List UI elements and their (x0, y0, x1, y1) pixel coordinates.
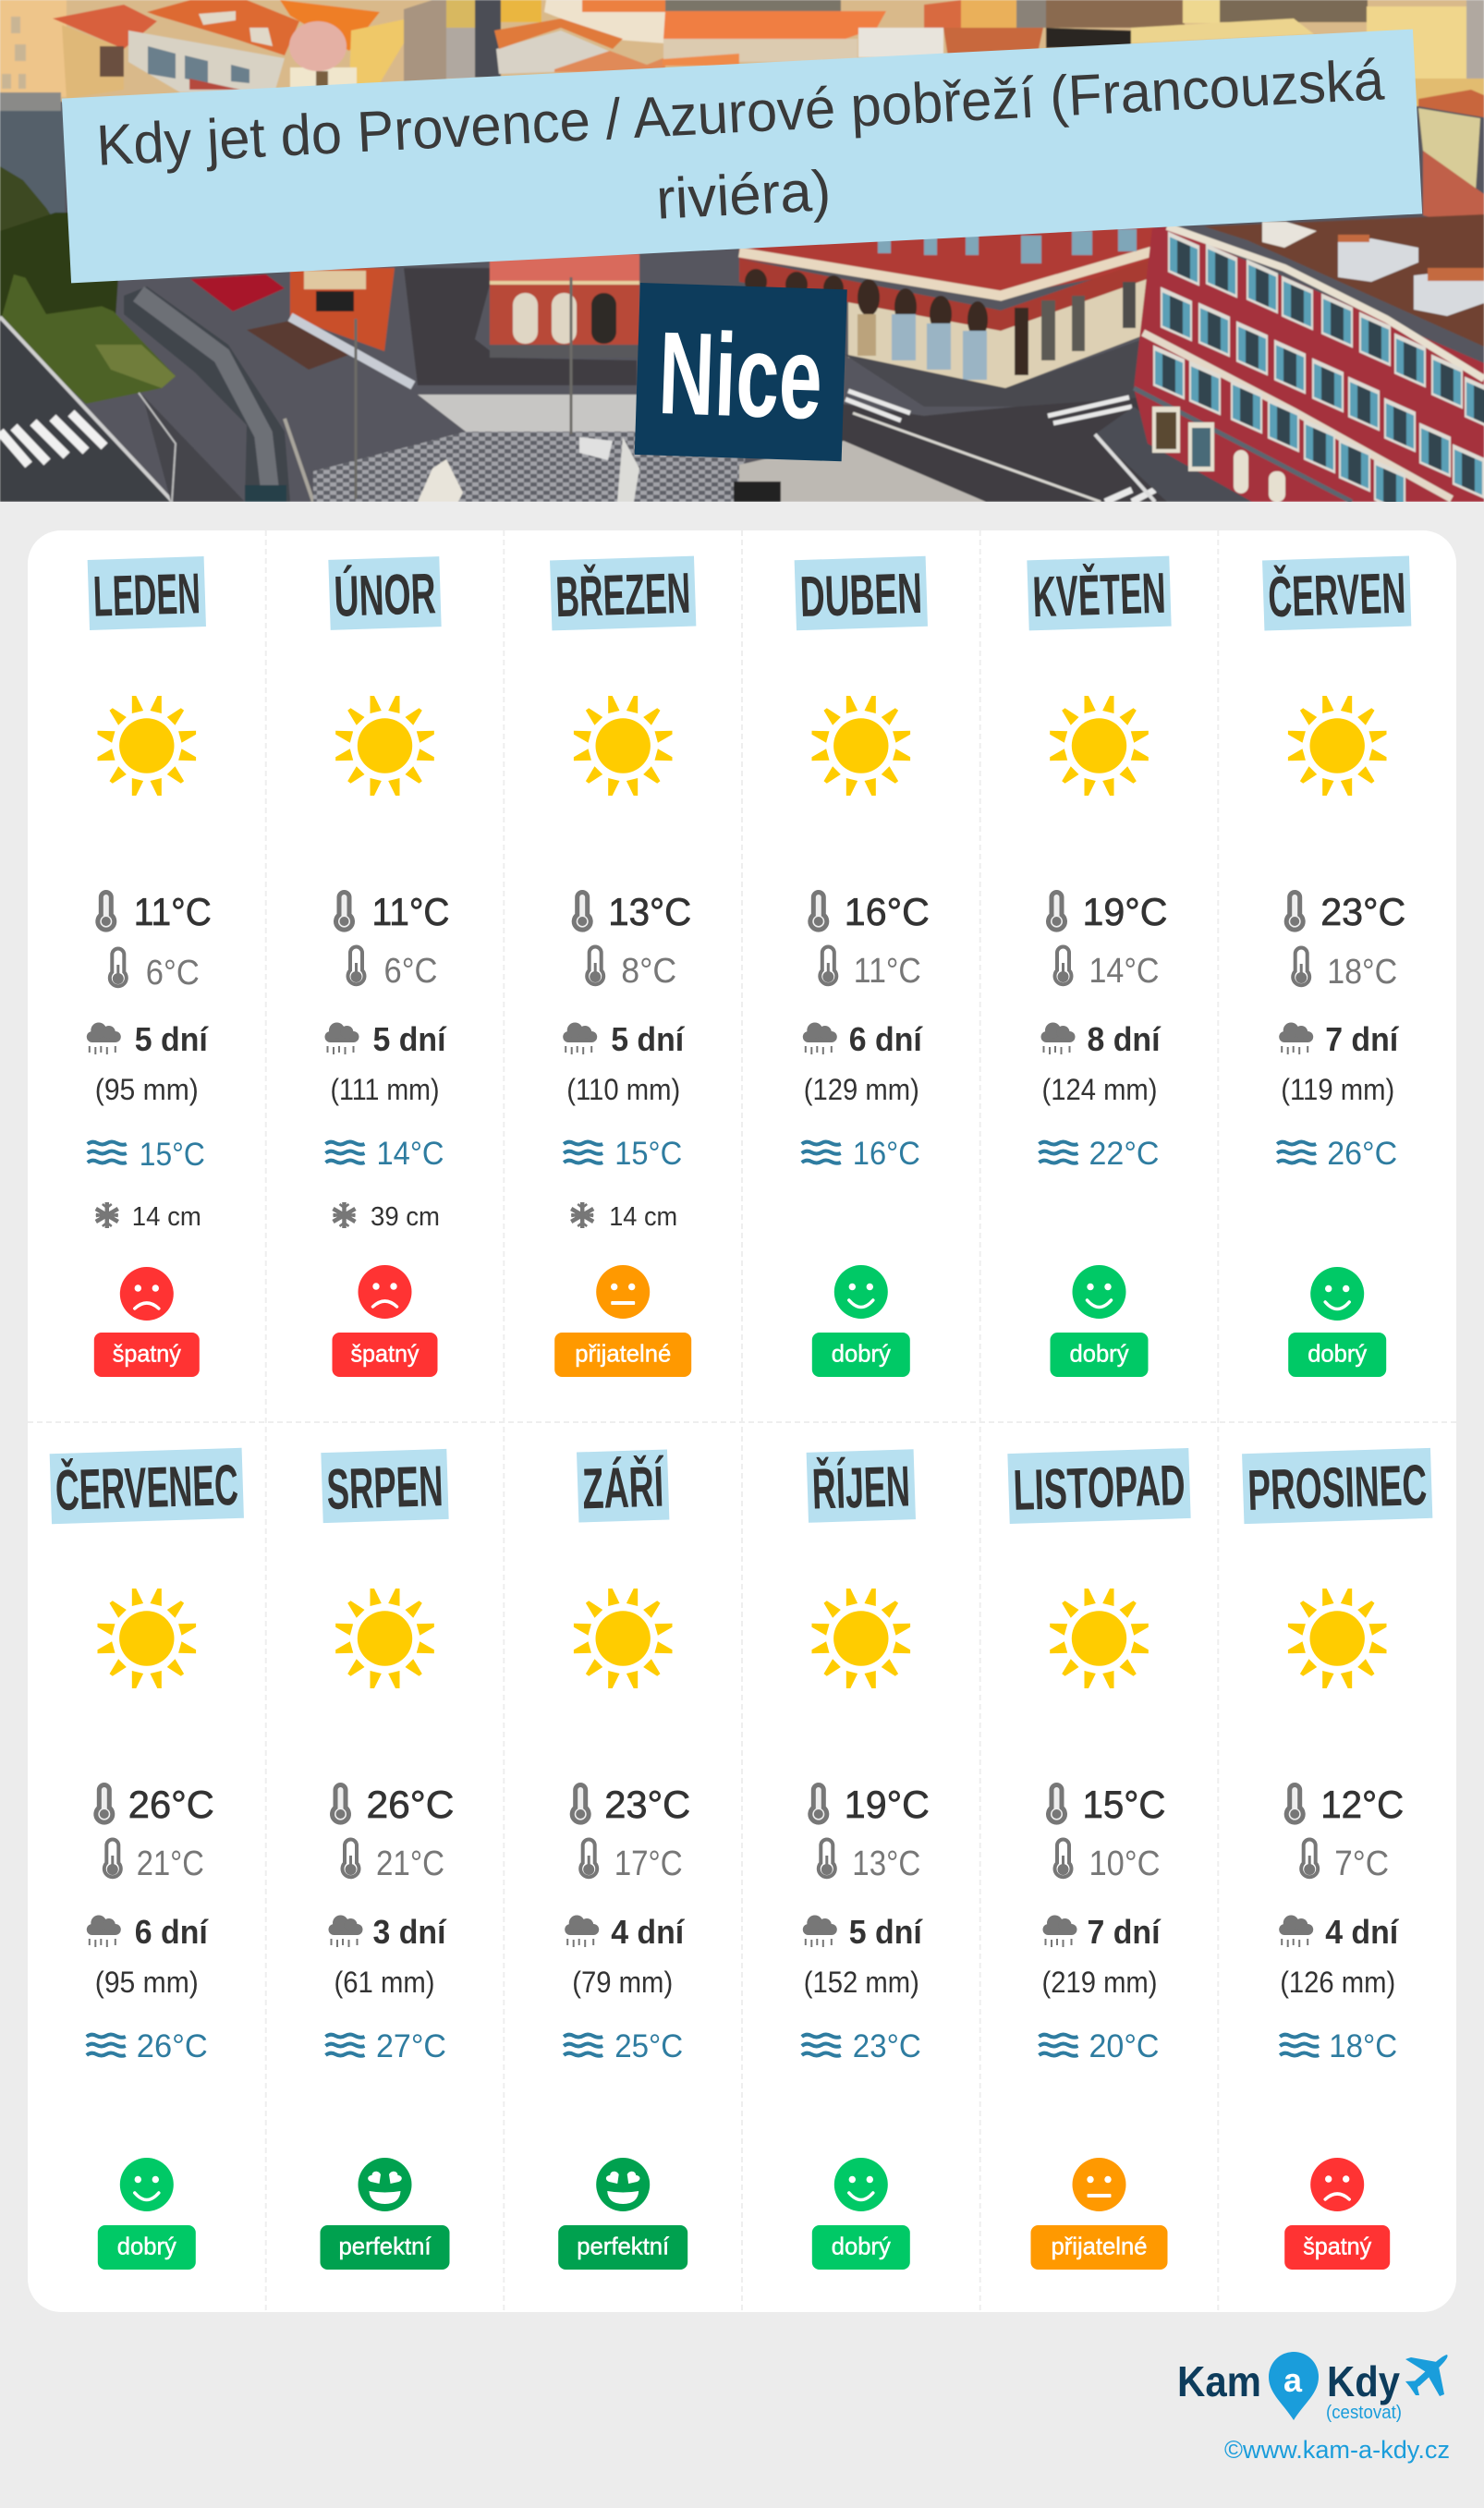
sea temperature: 15°C (614, 1136, 682, 1172)
rainy days (87, 1913, 209, 1951)
snowfall (96, 1202, 201, 1232)
month label: ČERVENEC (50, 1448, 244, 1524)
rating badge: dobrý (832, 1340, 891, 1368)
sea temperature (325, 2028, 446, 2064)
high temperature: 11°C (371, 890, 449, 933)
low temperature: 10°C (1089, 1844, 1161, 1883)
month label: ŘÍJEN: ŘÍJEN (811, 1455, 911, 1522)
rating badge: dobrý (1308, 1340, 1367, 1368)
high temperature (574, 890, 691, 933)
month label: SRPEN (321, 1449, 449, 1523)
rating badge (1288, 1333, 1386, 1377)
rating face (359, 2158, 412, 2211)
column: ZÁŘÍ (558, 1449, 690, 2270)
sea temperature: 23°C (853, 2028, 921, 2064)
low temperature: 11°C (854, 952, 921, 991)
logo: Kam a Kdy (cestovat): Kam (1177, 2357, 1261, 2405)
sea temperature (325, 1136, 444, 1172)
low temperature (819, 1839, 920, 1883)
rating badge: špatný (351, 1340, 420, 1368)
sea temperature (1280, 2028, 1397, 2064)
snowfall: 39 cm (371, 1202, 440, 1232)
high temperature (336, 890, 449, 933)
month label: ZÁŘÍ (577, 1449, 669, 1523)
hero photo: Place Masséna in Nice (0, 0, 1484, 515)
month label: LISTOPAD (1007, 1448, 1191, 1524)
icon: sun (335, 1589, 434, 1688)
icon: sun (98, 696, 196, 796)
low temperature (820, 946, 921, 991)
logo: Kam a Kdy (cestovat): (cestovat) (1326, 2403, 1402, 2423)
precipitation: (126 mm) (1280, 1966, 1395, 1999)
high temperature (1048, 1783, 1166, 1826)
low temperature: 8°C (621, 952, 676, 991)
month label: SRPEN: SRPEN (326, 1455, 444, 1522)
snowfall: 14 cm (132, 1202, 201, 1232)
rating face (834, 1265, 888, 1319)
month label: ŘÍJEN (807, 1449, 916, 1523)
low temperature (1055, 1839, 1161, 1883)
icon: sun (1050, 696, 1149, 796)
low temperature (104, 1839, 204, 1883)
rating face (1072, 1265, 1125, 1319)
low temperature (347, 946, 438, 991)
column: KVĚTEN (1027, 556, 1172, 1377)
high temperature: 15°C (1083, 1783, 1166, 1826)
rainy days: 6 dní (135, 1913, 209, 1951)
rainy days (1279, 1913, 1399, 1951)
icon: map pin (1269, 2352, 1319, 2420)
month label: DUBEN (795, 556, 928, 630)
column: ČERVENEC (50, 1448, 244, 2270)
icon: sun (811, 1589, 910, 1688)
low temperature (587, 946, 676, 991)
high temperature: 23°C (1320, 890, 1405, 933)
title banner (62, 30, 1422, 283)
column: BŘEZEN (550, 556, 696, 1377)
rating badge (333, 1333, 438, 1377)
high temperature: 19°C (1083, 890, 1168, 933)
rainy days: 5 dní (849, 1913, 923, 1951)
city label: Nice: Nice (657, 307, 824, 444)
column: ČERVEN (1262, 556, 1411, 1377)
sea temperature: 18°C (1329, 2028, 1397, 2064)
rating face (596, 1265, 650, 1319)
low temperature (1293, 948, 1397, 992)
column: ŘÍJEN (802, 1449, 930, 2270)
logo: Kam a Kdy (cestovat) (1177, 2352, 1448, 2423)
sea temperature: 26°C (137, 2028, 208, 2064)
low temperature (342, 1839, 444, 1883)
icon: sun (335, 696, 434, 796)
rainy days (563, 1020, 685, 1058)
precipitation: (124 mm) (1042, 1073, 1157, 1106)
sea temperature (1039, 1136, 1159, 1172)
rating badge (1031, 2225, 1168, 2270)
sea temperature: 16°C (853, 1136, 920, 1172)
icon: map pin: a (1283, 2361, 1303, 2399)
rating face (120, 2158, 174, 2211)
high temperature: 12°C (1320, 1783, 1404, 1826)
rainy days (565, 1913, 685, 1951)
icon: sun (574, 696, 673, 796)
high temperature: 19°C (845, 1783, 930, 1826)
sea temperature (802, 2028, 921, 2064)
rainy days (87, 1020, 209, 1058)
month label: ČERVEN (1262, 556, 1411, 630)
rainy days: 5 dní (611, 1020, 685, 1058)
month label: ZÁŘÍ: ZÁŘÍ (581, 1455, 665, 1521)
low temperature (580, 1839, 683, 1883)
rating face (1310, 2158, 1364, 2211)
sea temperature (1039, 2028, 1159, 2064)
precipitation: (129 mm) (804, 1073, 919, 1106)
rainy days: 7 dní (1087, 1913, 1161, 1951)
month label: LISTOPAD: LISTOPAD (1013, 1454, 1186, 1523)
rating face (834, 2158, 888, 2211)
high temperature: 11°C (134, 890, 212, 933)
precipitation: (95 mm) (95, 1073, 199, 1106)
rainy days (329, 1913, 446, 1951)
low temperature (1301, 1839, 1389, 1883)
sea temperature (564, 1136, 682, 1172)
low temperature (110, 948, 200, 992)
precipitation: (95 mm) (95, 1966, 199, 1999)
month label: BŘEZEN: BŘEZEN (554, 562, 691, 629)
rating badge: přijatelné (575, 1340, 671, 1368)
sea temperature (564, 2028, 683, 2064)
high temperature: 16°C (845, 890, 930, 933)
low temperature: 6°C (384, 952, 438, 991)
sea temperature: 26°C (1327, 1136, 1397, 1172)
rating badge: přijatelné (1052, 2233, 1148, 2260)
low temperature: 13°C (852, 1844, 920, 1883)
rainy days (1042, 1913, 1161, 1951)
rating badge (98, 2225, 196, 2270)
rainy days (325, 1020, 446, 1058)
high temperature: 13°C (608, 890, 691, 933)
low temperature (1055, 946, 1159, 991)
low temperature: 6°C (146, 954, 200, 992)
high temperature (98, 890, 212, 933)
logo: Kam a Kdy (cestovat): Kdy (1327, 2357, 1400, 2405)
high temperature: 26°C (128, 1783, 214, 1826)
column: SRPEN (320, 1449, 455, 2270)
rating badge: špatný (113, 1340, 181, 1368)
low temperature: 21°C (376, 1844, 444, 1883)
rating face (1072, 2158, 1125, 2211)
high temperature: 23°C (604, 1783, 690, 1826)
snowfall (571, 1202, 677, 1232)
precipitation: (152 mm) (804, 1966, 919, 1999)
precipitation: (61 mm) (335, 1966, 434, 1999)
title banner: Kdy jet do Provence / Azurové pobřeží (Francouzská (95, 48, 1386, 178)
rainy days: 5 dní (373, 1020, 446, 1058)
low temperature: 14°C (1089, 952, 1159, 991)
rating badge (1050, 1333, 1148, 1377)
city label: Nice (635, 283, 847, 461)
rating badge: perfektní (338, 2233, 432, 2260)
month label: DUBEN: DUBEN (799, 562, 923, 629)
icon: sun (1288, 1589, 1386, 1688)
rating badge: dobrý (117, 2233, 176, 2260)
rainy days: 6 dní (849, 1020, 923, 1058)
column: LEDEN (87, 556, 212, 1377)
rainy days (1040, 1020, 1161, 1058)
rating badge (94, 1333, 200, 1377)
rainy days: 8 dní (1087, 1020, 1161, 1058)
rating badge: perfektní (577, 2233, 670, 2260)
rating badge (558, 2225, 687, 2270)
rating face (359, 1265, 412, 1319)
column: ÚNOR (325, 556, 449, 1377)
rating face (1310, 1267, 1364, 1321)
sea temperature: 15°C (140, 1137, 205, 1173)
rating face (120, 1267, 174, 1321)
precipitation: (110 mm) (566, 1073, 680, 1106)
precipitation: (111 mm) (331, 1073, 440, 1106)
icon: sun (98, 1589, 196, 1688)
month label: KVĚTEN: KVĚTEN (1032, 562, 1167, 629)
sea temperature (88, 1137, 205, 1173)
rating badge: dobrý (832, 2233, 891, 2260)
precipitation: (219 mm) (1042, 1966, 1157, 1999)
rating badge (1284, 2225, 1390, 2270)
month label: ČERVENEC: ČERVENEC (55, 1454, 239, 1523)
low temperature: 18°C (1327, 953, 1397, 992)
column: PROSINEC (1242, 1448, 1432, 2270)
rating badge: špatný (1303, 2233, 1371, 2260)
rating badge (554, 1333, 691, 1377)
icon: airplane (1405, 2355, 1448, 2396)
low temperature: 17°C (614, 1844, 683, 1883)
low temperature: 21°C (137, 1844, 204, 1883)
rating badge: dobrý (1070, 1340, 1129, 1368)
rating face (596, 2158, 650, 2211)
precipitation: (79 mm) (572, 1966, 673, 1999)
icon: sun (811, 696, 910, 796)
rainy days: 4 dní (1325, 1913, 1399, 1951)
icon: sun (1288, 696, 1386, 796)
rating badge (812, 1333, 910, 1377)
high temperature: 26°C (366, 1783, 455, 1826)
sea temperature (87, 2028, 208, 2064)
sea temperature: 25°C (614, 2028, 683, 2064)
month label: LEDEN (88, 556, 206, 630)
sea temperature (1277, 1136, 1397, 1172)
panel: monthly table card (28, 530, 1456, 2312)
sea temperature: 27°C (376, 2028, 446, 2064)
column: DUBEN (795, 556, 930, 1377)
low temperature: 7°C (1334, 1844, 1389, 1883)
sea temperature: 22°C (1089, 1136, 1159, 1172)
rainy days (803, 1020, 923, 1058)
snowfall (333, 1202, 440, 1232)
rainy days (1279, 1020, 1399, 1058)
month label: ÚNOR: ÚNOR (334, 562, 437, 629)
rating badge (812, 2225, 910, 2270)
rainy days: 7 dní (1325, 1020, 1399, 1058)
rating badge (320, 2225, 449, 2270)
copyright URL: ©www.kam-a-kdy.cz (1224, 2436, 1450, 2464)
title banner: riviéra) (655, 159, 833, 232)
rainy days (803, 1913, 923, 1951)
column: LISTOPAD (1007, 1448, 1191, 2270)
snowfall: 14 cm (609, 1202, 677, 1232)
sea temperature: 20°C (1089, 2028, 1159, 2064)
high temperature (1286, 1783, 1404, 1826)
rainy days: 5 dní (135, 1020, 209, 1058)
icon: sun (1050, 1589, 1149, 1688)
month label: LEDEN: LEDEN (92, 562, 201, 629)
sea temperature: 14°C (377, 1136, 444, 1172)
rainy days: 3 dní (373, 1913, 446, 1951)
precipitation: (119 mm) (1281, 1073, 1394, 1106)
month label: ÚNOR (328, 556, 442, 630)
month label: BŘEZEN (550, 556, 696, 630)
sea temperature (802, 1136, 920, 1172)
month label: KVĚTEN (1027, 556, 1172, 630)
rainy days: 4 dní (611, 1913, 685, 1951)
icon: sun (574, 1589, 673, 1688)
